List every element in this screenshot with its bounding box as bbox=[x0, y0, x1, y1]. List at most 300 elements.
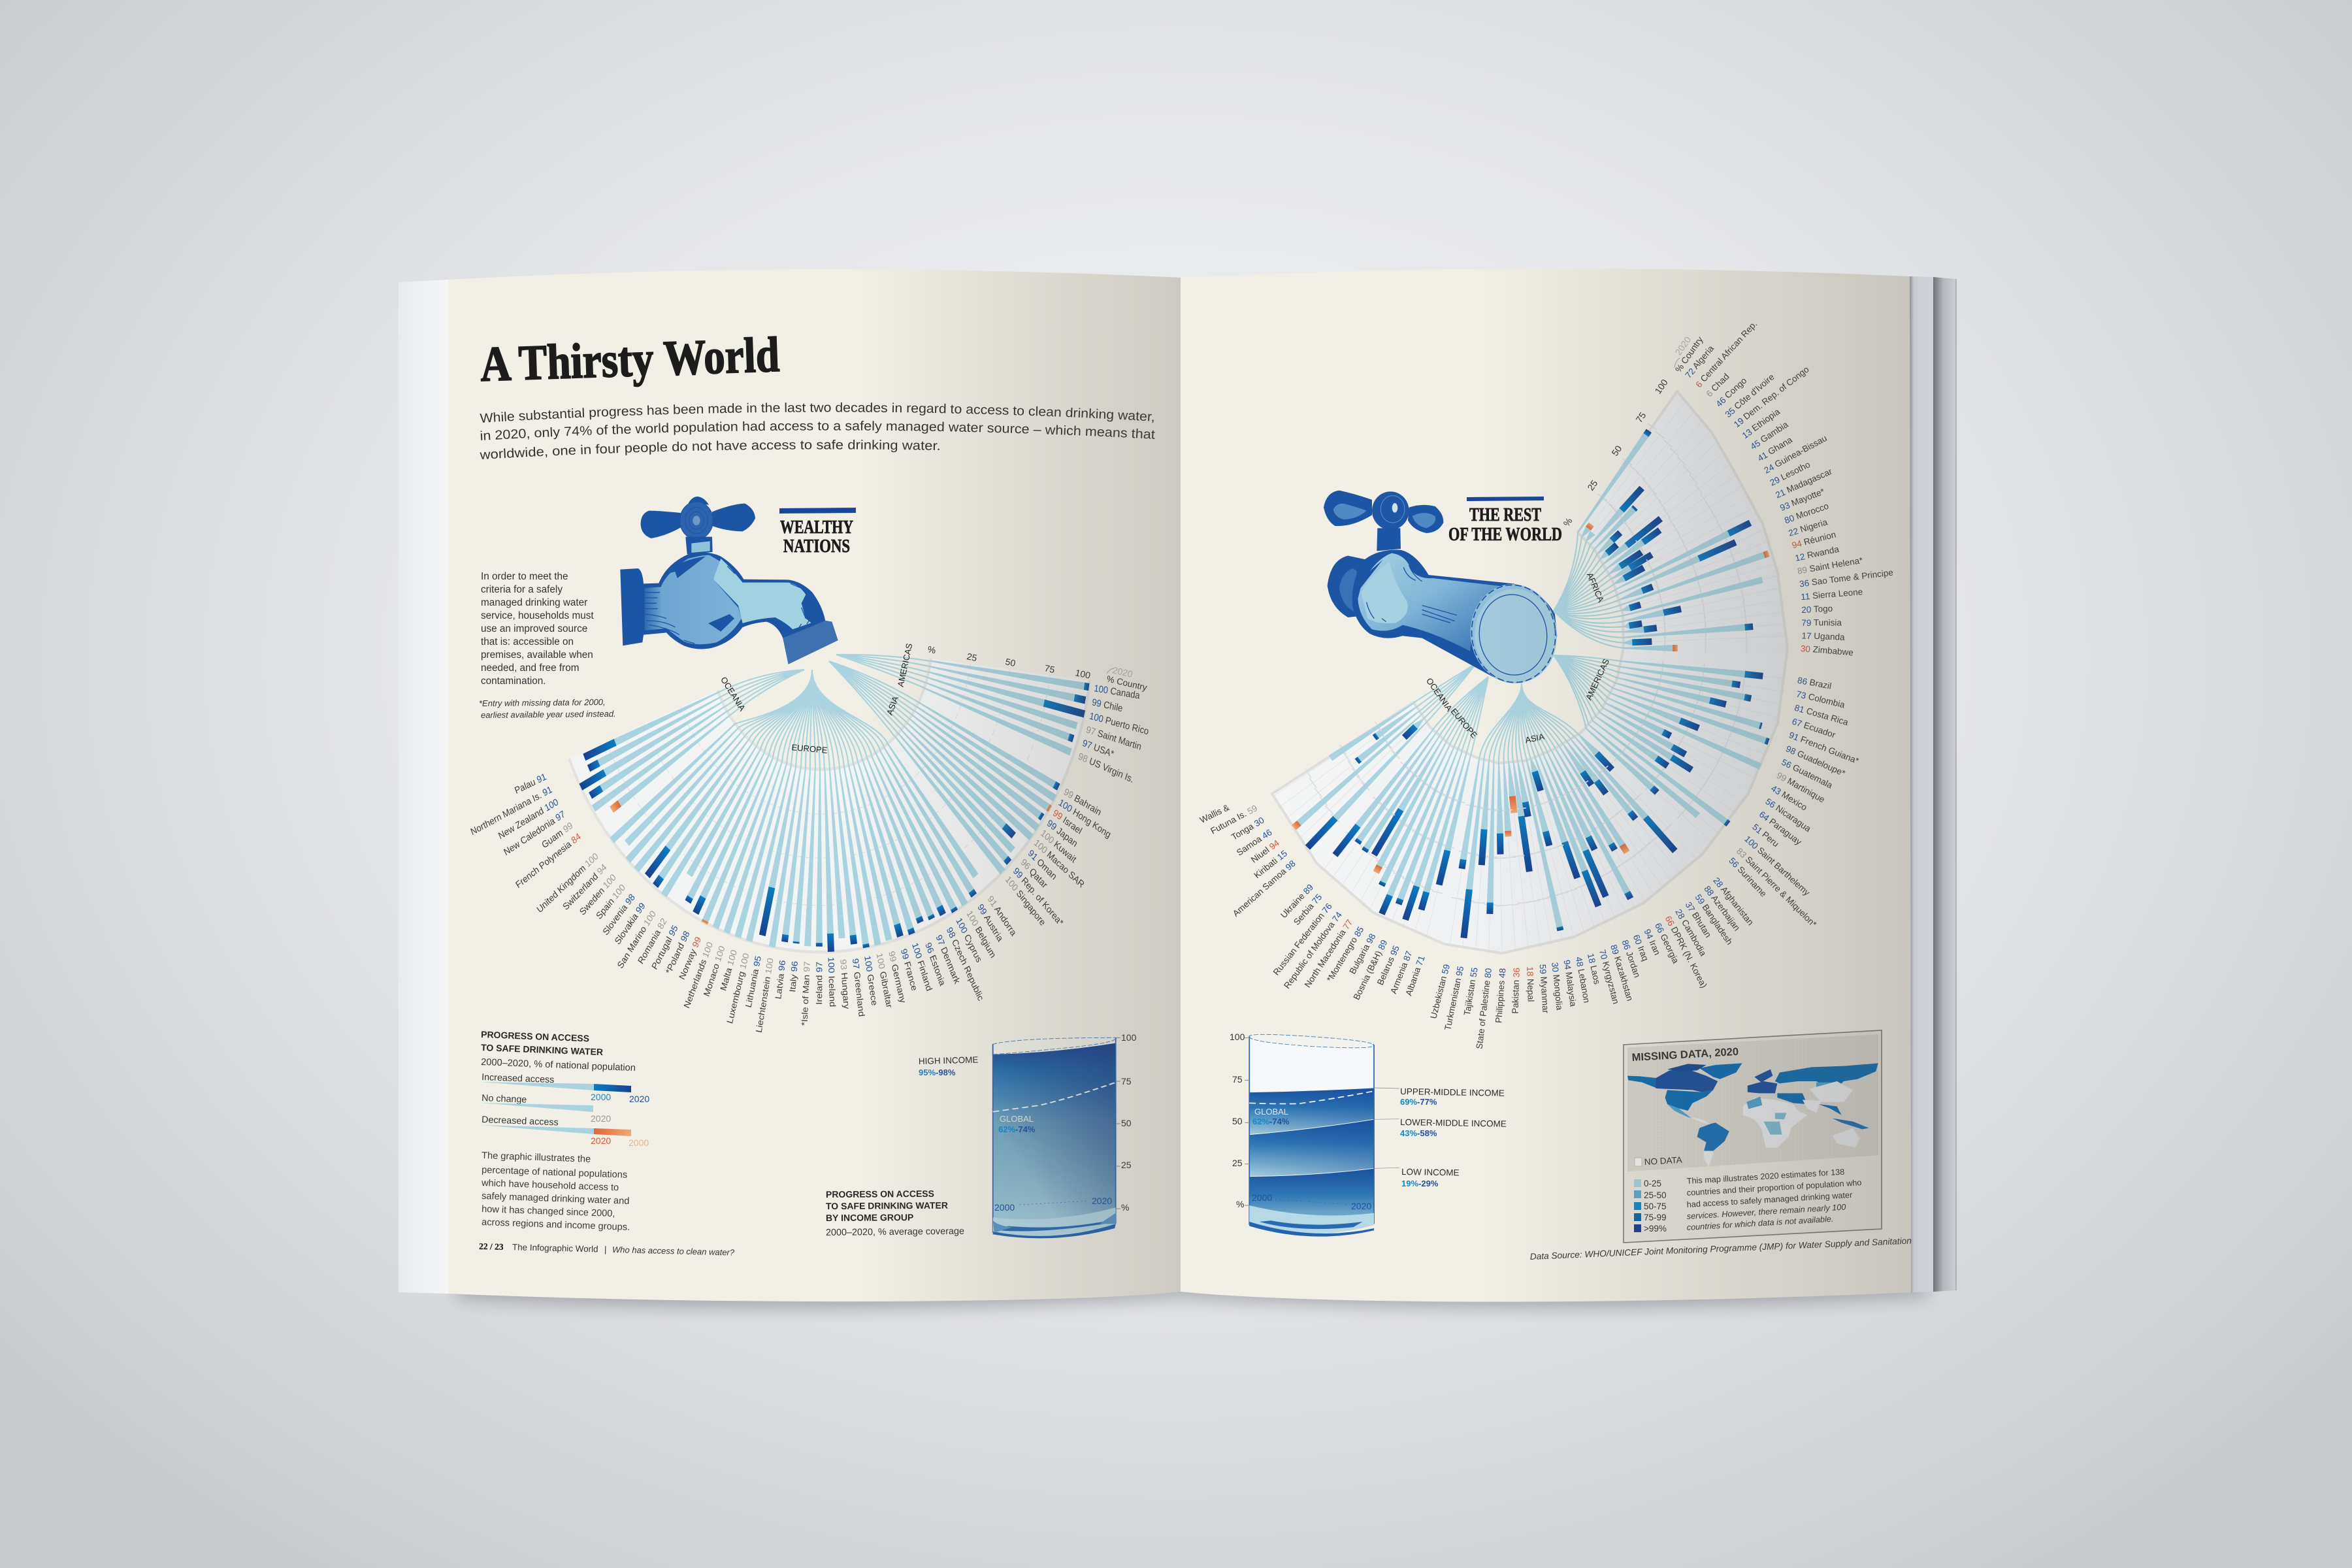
country labels: wealthy nations: Ireland 97 bbox=[814, 962, 824, 1005]
map description: This map illustrates 2020 estimates for 138 bbox=[1686, 1168, 1845, 1186]
country labels: wealthy nations: Romania 82 bbox=[636, 916, 669, 966]
legend row: increased access: Increased access bbox=[482, 1072, 555, 1085]
legend description text: percentage of national populations bbox=[482, 1165, 627, 1181]
income label: low: 19%-29% bbox=[1401, 1179, 1439, 1188]
panel: left page bbox=[448, 269, 1181, 1301]
chart label: income group heading: 2000–2020, % average coverage bbox=[826, 1226, 964, 1238]
country labels: asia: State of Palestine 80 bbox=[1475, 968, 1494, 1049]
country labels: africa: 6 Central African Rep. bbox=[1693, 319, 1759, 389]
scale labels: rest of the world bbox=[1561, 335, 1705, 529]
scale labels: rest of the world: 75 bbox=[1633, 410, 1648, 425]
country labels: wealthy nations: 100 Canada bbox=[1094, 682, 1141, 701]
map description: had access to safely managed drinking water bbox=[1686, 1190, 1853, 1209]
glass axis: 100 bbox=[1121, 1032, 1137, 1043]
scale labels: wealthy nations: 2020 bbox=[1111, 664, 1134, 679]
scale labels: wealthy nations bbox=[926, 644, 1148, 693]
heading: wealthy nations bbox=[779, 508, 856, 557]
map description: countries for which data is not available. bbox=[1686, 1215, 1834, 1232]
country labels: europe: *Montenegro 85 bbox=[1325, 924, 1365, 984]
glass chart: high income: 2020 bbox=[1092, 1196, 1112, 1206]
country labels: europe: North Macedonia 77 bbox=[1303, 917, 1354, 989]
criteria text block: service, households must bbox=[481, 610, 594, 621]
country labels: africa bbox=[1683, 319, 1894, 658]
global label: GLOBAL bbox=[1000, 1114, 1034, 1124]
country labels: wealthy nations: French Polynesia 84 bbox=[514, 830, 583, 890]
country labels: wealthy nations: Spain 100 bbox=[594, 881, 627, 921]
country labels: americas: 73 Colombia bbox=[1795, 689, 1846, 710]
income label: lower-middle: LOWER-MIDDLE INCOME bbox=[1400, 1117, 1507, 1129]
country labels: wealthy nations: 100 Finland bbox=[910, 941, 934, 992]
legend row: no change: 2020 bbox=[591, 1113, 611, 1124]
country labels: europe: Bosnia (B&H) 89 bbox=[1352, 938, 1389, 1002]
legend description text bbox=[481, 1151, 630, 1233]
chart label: income group heading: TO SAFE DRINKING WATER bbox=[826, 1200, 948, 1211]
country labels: wealthy nations: Portugal 95 bbox=[649, 923, 680, 972]
global label bbox=[998, 1114, 1036, 1134]
country labels: americas: 99 Martinique bbox=[1775, 770, 1827, 805]
heading: wealthy nations: NATIONS bbox=[783, 536, 850, 557]
criteria text block: use an improved source bbox=[481, 623, 587, 634]
country labels: asia: 59 Myanmar bbox=[1538, 964, 1550, 1014]
glass chart: low and middle income bbox=[1230, 1032, 1507, 1237]
bars: americas bbox=[1582, 655, 1787, 847]
region labels: rest of the world: AMERICAS bbox=[1584, 657, 1611, 702]
legend description text: across regions and income groups. bbox=[482, 1217, 630, 1233]
footnote: earliest available year used instead. bbox=[481, 709, 616, 720]
world map bbox=[1627, 1034, 1878, 1171]
legend description text: safely managed drinking water and bbox=[482, 1191, 630, 1207]
map description: services. However, there remain nearly 100 bbox=[1686, 1203, 1846, 1221]
country labels: asia: Tajikistan 55 bbox=[1462, 967, 1479, 1016]
country labels: wealthy nations: 98 Czech Republic bbox=[945, 925, 986, 1002]
map legend: 75-99 bbox=[1644, 1213, 1667, 1222]
income label: high income: HIGH INCOME bbox=[919, 1054, 979, 1066]
country labels: africa: 29 Lesotho bbox=[1768, 459, 1812, 487]
legend description text: The graphic illustrates the bbox=[482, 1151, 591, 1165]
country labels: africa: 72 Algeria bbox=[1683, 343, 1716, 380]
country labels: americas: 86 Brazil bbox=[1797, 675, 1832, 691]
country labels: wealthy nations: Lithuania 95 bbox=[743, 955, 763, 1009]
streams: asia bbox=[1479, 683, 1579, 763]
country labels: africa: 94 Réunion bbox=[1791, 529, 1837, 550]
country labels: wealthy nations: Northern Mariana Is. 91 bbox=[469, 783, 553, 837]
country labels: oceania: Kiribati 15 bbox=[1252, 848, 1289, 881]
streams: americas bbox=[836, 655, 930, 688]
country labels: wealthy nations: Slovenia 98 bbox=[600, 891, 637, 938]
country labels: wealthy nations: 100 Puerto Rico bbox=[1088, 710, 1150, 737]
country labels: asia: 28 Afghanistan bbox=[1712, 875, 1756, 927]
country labels: africa: 35 Côte d'Ivoire bbox=[1723, 372, 1776, 419]
map legend: >99% bbox=[1644, 1224, 1667, 1233]
panel: missing data map bbox=[1624, 1030, 1882, 1243]
criteria text block: In order to meet the bbox=[481, 571, 568, 582]
region labels: wealthy nations: ASIA bbox=[885, 694, 900, 716]
chart label: income group heading: PROGRESS ON ACCESS bbox=[826, 1188, 934, 1200]
map no data key: NO DATA bbox=[1644, 1155, 1682, 1167]
country labels: wealthy nations: 99 France bbox=[899, 947, 920, 992]
page footer: Who has access to clean water? bbox=[612, 1245, 735, 1258]
region labels: wealthy nations: EUROPE bbox=[791, 742, 828, 755]
map legend: 50-75 bbox=[1644, 1201, 1667, 1211]
country labels: wealthy nations: 100 Iceland bbox=[826, 956, 838, 1007]
country labels: africa: 79 Tunisia bbox=[1801, 617, 1842, 628]
country labels: africa: 45 Gambia bbox=[1748, 419, 1790, 451]
country labels: africa: 89 Saint Helena* bbox=[1797, 555, 1864, 576]
country labels: asia: 88 Azerbaijan bbox=[1703, 884, 1742, 933]
country labels: americas: 81 Costa Rica bbox=[1793, 702, 1850, 727]
country labels: wealthy nations: 97 USA* bbox=[1081, 737, 1116, 759]
country labels: americas: 56 Guatemala bbox=[1780, 757, 1835, 791]
country labels: africa: 36 Sao Tome & Principe bbox=[1799, 567, 1894, 589]
country labels: africa: 19 Dem. Rep. of Congo bbox=[1732, 365, 1811, 429]
country labels: europe: Russian Federation 76 bbox=[1271, 901, 1333, 977]
scale labels: wealthy nations: % Country bbox=[1105, 674, 1148, 693]
region labels: rest of the world bbox=[1424, 571, 1611, 745]
country labels: oceania: Wallis & bbox=[1198, 802, 1231, 825]
legend row: no change bbox=[481, 1093, 611, 1124]
bars: wealthy nations bbox=[580, 657, 1089, 952]
country labels: wealthy nations: 100 Belgium bbox=[965, 908, 998, 960]
legend row: decreased access: Decreased access bbox=[482, 1115, 559, 1128]
criteria text block: criteria for a safely bbox=[481, 584, 563, 595]
country labels: europe: Armenia 87 bbox=[1388, 949, 1414, 995]
chart label: income group heading bbox=[826, 1188, 964, 1238]
income label: global: GLOBAL bbox=[1254, 1107, 1288, 1117]
streams: africa bbox=[1554, 532, 1624, 648]
country labels: wealthy nations: Slovakia 99 bbox=[612, 900, 647, 947]
income label: upper-middle bbox=[1400, 1086, 1505, 1107]
streams: europe bbox=[1432, 677, 1488, 756]
criteria text block: contamination. bbox=[481, 676, 546, 687]
magazine page stack on the right edge bbox=[1910, 276, 1956, 1292]
legend row: decreased access: 2020 bbox=[591, 1135, 611, 1146]
country labels: americas bbox=[1727, 675, 1861, 930]
country labels: asia: 37 Bhutan bbox=[1684, 900, 1713, 939]
region labels: rest of the world: EUROPE bbox=[1449, 706, 1480, 740]
country labels: africa: 30 Zimbabwe bbox=[1800, 644, 1854, 658]
country labels: wealthy nations: 97 Greenland bbox=[851, 958, 867, 1017]
criteria text block: premises, available when bbox=[481, 649, 593, 661]
country labels: wealthy nations: 93 Hungary bbox=[838, 958, 852, 1009]
icon: blue tap, rest of the world bbox=[1324, 491, 1561, 687]
map legend: 25-50 bbox=[1644, 1190, 1667, 1200]
country labels: americas: 56 Nicaragua bbox=[1764, 796, 1813, 834]
country labels: americas: 83 Saint Pierre & Miquelon* bbox=[1735, 846, 1819, 930]
chart label: income group heading: BY INCOME GROUP bbox=[826, 1212, 913, 1223]
scale labels: rest of the world: 50 bbox=[1609, 444, 1624, 458]
country labels: oceania: Futuna Is. 59 bbox=[1209, 803, 1259, 836]
income label: high income: 95%-98% bbox=[919, 1068, 956, 1077]
income label: low: LOW INCOME bbox=[1401, 1167, 1460, 1178]
legend row: increased access bbox=[481, 1072, 649, 1104]
country labels: wealthy nations: 100 Kuwait bbox=[1039, 827, 1079, 865]
legend: progress on access: 2000–2020, % of national population bbox=[481, 1057, 636, 1073]
country labels: wealthy nations: 100 Cyprus bbox=[955, 916, 984, 964]
glass axis: 100 bbox=[1230, 1032, 1245, 1042]
intro paragraph: worldwide, one in four people do not have access to safe drinking water. bbox=[480, 440, 939, 459]
country labels: americas: 67 Ecuador bbox=[1791, 716, 1837, 740]
country labels: europe: Ukraine 89 bbox=[1279, 882, 1315, 920]
legend row: increased access: 2000 bbox=[591, 1092, 611, 1102]
country labels: wealthy nations: Norway 99 bbox=[677, 935, 703, 981]
country labels: asia: Turkmenistan 95 bbox=[1443, 965, 1465, 1031]
country labels: wealthy nations: Switzerland 94 bbox=[561, 861, 609, 912]
country labels: wealthy nations: *Poland 98 bbox=[663, 928, 691, 976]
country labels: africa: 12 Rwanda bbox=[1794, 544, 1840, 563]
region labels: rest of the world: ASIA bbox=[1524, 732, 1545, 745]
fan background sector bbox=[569, 659, 1090, 952]
country labels: europe: Serbia 75 bbox=[1292, 892, 1324, 927]
intro paragraph bbox=[480, 402, 1155, 459]
intro paragraph: While substantial progress has been made in the last two decades in regard to access to clean drinking water, bbox=[480, 402, 1154, 423]
country labels: wealthy nations: Malta 100 bbox=[718, 948, 739, 992]
country labels: americas: 98 Guadeloupe* bbox=[1784, 743, 1847, 779]
scale labels: wealthy nations: 25 bbox=[966, 651, 978, 663]
glass axis bbox=[1121, 1032, 1137, 1213]
country labels: asia: 30 Mongolia bbox=[1550, 962, 1565, 1011]
title: A Thirsty World bbox=[480, 327, 780, 392]
footnote bbox=[479, 697, 616, 720]
legend row: no change: No change bbox=[482, 1093, 527, 1105]
income label: global bbox=[1252, 1107, 1290, 1126]
country labels: africa: 93 Mayotte* bbox=[1778, 486, 1826, 513]
country labels: wealthy nations: New Zealand 100 bbox=[497, 796, 560, 841]
country labels: americas: 100 Saint Barthelemy bbox=[1742, 834, 1812, 898]
country labels: africa: 80 Morocco bbox=[1783, 501, 1830, 525]
bars: europe bbox=[1318, 727, 1476, 939]
legend description text: how it has changed since 2000, bbox=[482, 1204, 615, 1219]
country labels: wealthy nations bbox=[469, 682, 1150, 1034]
glass chart: low and middle income: 2000 bbox=[1252, 1192, 1272, 1203]
page shading overlay: left bbox=[448, 269, 1181, 1301]
scale labels: rest of the world: 25 bbox=[1585, 478, 1600, 493]
scale labels: wealthy nations: 75 bbox=[1043, 662, 1056, 675]
page shading overlay: right bbox=[1181, 269, 1911, 1302]
bars: africa bbox=[1573, 388, 1788, 654]
legend row: decreased access: 2000 bbox=[629, 1137, 649, 1148]
page footer: The Infographic World bbox=[512, 1242, 598, 1254]
country labels: africa: 11 Sierra Leone bbox=[1801, 587, 1863, 602]
country labels: asia: 89 Kazakhstan bbox=[1609, 943, 1635, 1002]
streams: oceania bbox=[718, 670, 804, 715]
country labels: asia: 94 Malaysia bbox=[1562, 959, 1578, 1007]
country labels: oceania: Niuel 94 bbox=[1249, 838, 1281, 865]
chart: rest of the world radial fan bbox=[1198, 319, 1894, 1049]
country labels: wealthy nations: San Marino 100 bbox=[615, 908, 658, 970]
country labels: wealthy nations: 96 Estonia bbox=[923, 941, 948, 987]
country labels: asia: Uzbekistan 59 bbox=[1428, 963, 1452, 1020]
country labels: americas: 51 Peru bbox=[1751, 822, 1781, 849]
country labels: wealthy nations: 91 Oman bbox=[1026, 847, 1059, 882]
streams: europe bbox=[735, 670, 888, 770]
glass chart: high income bbox=[919, 1032, 1137, 1238]
country labels: africa: 46 Congo bbox=[1714, 376, 1748, 409]
country labels: africa: 6 Chad bbox=[1704, 372, 1731, 399]
heading: the rest of the world: OF THE WORLD bbox=[1448, 525, 1562, 545]
region labels: rest of the world: AFRICA bbox=[1585, 571, 1606, 604]
legend row: decreased access bbox=[481, 1115, 649, 1148]
map legend bbox=[1634, 1179, 1667, 1233]
country labels: americas: 91 French Guiana* bbox=[1788, 730, 1861, 766]
country labels: americas: 43 Mexico bbox=[1769, 783, 1809, 813]
global label: 62%-74% bbox=[998, 1124, 1036, 1134]
glass axis: 75 bbox=[1121, 1076, 1132, 1086]
bars: asia bbox=[1444, 731, 1701, 953]
country labels: asia: 28 Cambodia bbox=[1674, 907, 1708, 958]
country labels: asia: 70 Kyrgyzstan bbox=[1597, 949, 1621, 1005]
country labels: wealthy nations: Monaco 100 bbox=[702, 944, 727, 998]
country labels: wealthy nations: Liechtenstein 100 bbox=[754, 957, 775, 1034]
country labels: africa: 21 Madagascar bbox=[1774, 466, 1834, 500]
country labels: africa: 20 Togo bbox=[1801, 604, 1833, 615]
legend: progress on access: TO SAFE DRINKING WATER bbox=[481, 1042, 603, 1057]
glass axis: 25 bbox=[1121, 1160, 1132, 1170]
country labels: wealthy nations: 97 Denmark bbox=[934, 933, 962, 985]
country labels: oceania: Samoa 46 bbox=[1235, 827, 1273, 858]
country labels: europe: Republic of Moldova 74 bbox=[1282, 909, 1344, 990]
criteria text block: needed, and free from bbox=[481, 662, 580, 674]
legend: progress on access bbox=[481, 1029, 649, 1148]
footnote: *Entry with missing data for 2000, bbox=[479, 697, 606, 708]
country labels: oceania: American Samoa 98 bbox=[1231, 858, 1298, 919]
country labels: wealthy nations: 99 Israel bbox=[1051, 807, 1084, 836]
country labels: wealthy nations: 98 US Virgin Is. bbox=[1077, 750, 1135, 785]
glass axis: % bbox=[1236, 1199, 1244, 1209]
glass axis bbox=[1230, 1032, 1245, 1209]
band: lower-middle income bbox=[1249, 1119, 1374, 1179]
income label: lower-middle: 43%-58% bbox=[1400, 1128, 1437, 1138]
country labels: americas: 64 Paraguay bbox=[1757, 809, 1804, 847]
intro paragraph: in 2020, only 74% of the world population had access to a safely managed water source – which means that bbox=[481, 421, 1155, 440]
criteria text block: managed drinking water bbox=[481, 597, 587, 608]
band: upper-middle income bbox=[1249, 1088, 1374, 1137]
page footer: 22 / 23 bbox=[479, 1241, 504, 1252]
country labels: wealthy nations: 99 Rep. of Korea* bbox=[1011, 865, 1066, 928]
income label: lower-middle bbox=[1400, 1117, 1507, 1138]
legend: progress on access: PROGRESS ON ACCESS bbox=[481, 1029, 589, 1043]
country labels: asia: 48 Lebanon bbox=[1574, 956, 1592, 1004]
country labels: wealthy nations: Luxembourg 100 bbox=[725, 952, 751, 1024]
country labels: africa: 22 Nigeria bbox=[1787, 517, 1829, 538]
country labels: wealthy nations: 100 Singapore bbox=[1004, 874, 1048, 928]
chart: wealthy nations radial fan bbox=[469, 642, 1150, 1034]
streams: asia bbox=[829, 661, 919, 737]
country labels: wealthy nations: 99 Bahrain bbox=[1062, 786, 1103, 818]
white page edge on the left bbox=[399, 280, 448, 1294]
country labels: asia: Pakistan 36 bbox=[1511, 968, 1521, 1014]
country labels: wealthy nations: 100 Macao SAR bbox=[1032, 837, 1086, 890]
country labels: europe: Bulgaria 98 bbox=[1347, 932, 1377, 975]
glass axis: 50 bbox=[1232, 1116, 1243, 1126]
country labels: wealthy nations: 100 Gibraltar bbox=[875, 952, 894, 1009]
region labels: wealthy nations bbox=[719, 642, 914, 755]
band: low income bbox=[1249, 1168, 1374, 1233]
heading: the rest of the world bbox=[1448, 497, 1562, 545]
fan background sector bbox=[1272, 391, 1788, 953]
country labels: wealthy nations: 99 Chile bbox=[1091, 696, 1124, 713]
scale labels: wealthy nations: 50 bbox=[1004, 656, 1017, 668]
region labels: wealthy nations: OCEANIA bbox=[719, 675, 747, 713]
country labels: wealthy nations: Palau 91 bbox=[513, 771, 547, 796]
bars: oceania bbox=[1269, 698, 1430, 854]
country labels: wealthy nations: 99 Japan bbox=[1045, 817, 1079, 849]
country labels: wealthy nations: Netherlands 100 bbox=[681, 940, 715, 1010]
heading: the rest of the world: THE REST bbox=[1469, 505, 1541, 525]
income label: high income bbox=[919, 1054, 979, 1077]
country labels: wealthy nations: 96 Qatar bbox=[1019, 857, 1050, 890]
country labels: wealthy nations: New Caledonia 97 bbox=[502, 808, 567, 858]
country labels: wealthy nations: United Kingdom 100 bbox=[534, 850, 600, 915]
glass axis: % bbox=[1121, 1202, 1129, 1213]
page shadow under the book bbox=[457, 1281, 1927, 1309]
country labels: wealthy nations: Latvia 96 bbox=[773, 959, 787, 1000]
country labels: americas: 56 Suriname bbox=[1727, 855, 1769, 899]
country labels: wealthy nations: Sweden 100 bbox=[578, 872, 618, 917]
country labels: wealthy nations: 97 Saint Martin bbox=[1085, 724, 1143, 752]
country labels: europe: Belarus 95 bbox=[1375, 944, 1401, 987]
country labels: wealthy nations: *Isle of Man 97 bbox=[799, 961, 812, 1026]
glass axis: 50 bbox=[1121, 1118, 1132, 1128]
map title: MISSING DATA, 2020 bbox=[1631, 1046, 1739, 1064]
panel: right page bbox=[1181, 269, 1911, 1302]
country labels: wealthy nations: Guam 99 bbox=[540, 819, 574, 851]
country labels: wealthy nations: 99 Germany bbox=[887, 950, 908, 1004]
criteria text block bbox=[481, 571, 594, 687]
scale labels: rest of the world: % Country bbox=[1673, 335, 1705, 374]
country labels: oceania bbox=[1198, 802, 1298, 919]
scale labels: rest of the world: 2020 bbox=[1673, 335, 1693, 357]
page footer: | bbox=[604, 1245, 607, 1254]
region labels: wealthy nations: AMERICAS bbox=[896, 642, 914, 688]
country labels: wealthy nations: 91 Andorra bbox=[986, 894, 1019, 938]
legend row: increased access: 2020 bbox=[629, 1094, 649, 1104]
income label: upper-middle: 69%-77% bbox=[1400, 1097, 1437, 1107]
country labels: asia: 66 DPRK (N. Korea) bbox=[1663, 914, 1709, 990]
country labels: wealthy nations: 99 Austria bbox=[976, 902, 1005, 943]
country labels: africa: 41 Ghana bbox=[1756, 434, 1794, 463]
country labels: asia bbox=[1428, 875, 1756, 1049]
scale labels: wealthy nations: % bbox=[926, 644, 937, 656]
icon: blue tap, wealthy nations bbox=[620, 497, 838, 664]
country labels: wealthy nations: 100 Greece bbox=[862, 955, 880, 1007]
glass axis: 75 bbox=[1232, 1074, 1243, 1085]
country labels: africa: 17 Uganda bbox=[1801, 630, 1845, 642]
country labels: asia: 94 Iran bbox=[1642, 928, 1662, 956]
country labels: wealthy nations: Italy 96 bbox=[787, 960, 800, 992]
country labels: asia: 18 Nepal bbox=[1526, 966, 1536, 1002]
country labels: africa: 24 Guinea-Bissau bbox=[1762, 433, 1829, 475]
glass chart: high income: 2000 bbox=[994, 1202, 1015, 1213]
country labels: oceania: Tonga 30 bbox=[1230, 815, 1266, 842]
legend description text: which have household access to bbox=[481, 1178, 619, 1193]
streams: oceania bbox=[1413, 663, 1477, 723]
scale labels: wealthy nations: 100 bbox=[1074, 667, 1092, 681]
heading: wealthy nations: WEALTHY bbox=[780, 517, 853, 538]
country labels: asia: Philippines 48 bbox=[1494, 968, 1507, 1023]
criteria text block: that is: accessible on bbox=[481, 636, 574, 647]
glass axis: 25 bbox=[1232, 1158, 1243, 1168]
scale labels: rest of the world: % bbox=[1561, 515, 1575, 529]
income label: low bbox=[1401, 1167, 1460, 1188]
country labels: asia: 18 Laos bbox=[1586, 953, 1602, 985]
country labels: asia: 60 Iraq bbox=[1631, 933, 1650, 962]
income label: global: 62%-74% bbox=[1252, 1117, 1290, 1126]
data source: Data Source: WHO/UNICEF Joint Monitoring Programme (JMP) for Water Supply and Sanitation bbox=[1529, 1236, 1912, 1262]
region labels: rest of the world: OCEANIA bbox=[1424, 676, 1454, 713]
country labels: asia: 66 Georgia bbox=[1653, 921, 1681, 965]
glass chart: low and middle income: 2020 bbox=[1351, 1201, 1371, 1211]
country labels: europe: Albania 71 bbox=[1404, 955, 1426, 997]
